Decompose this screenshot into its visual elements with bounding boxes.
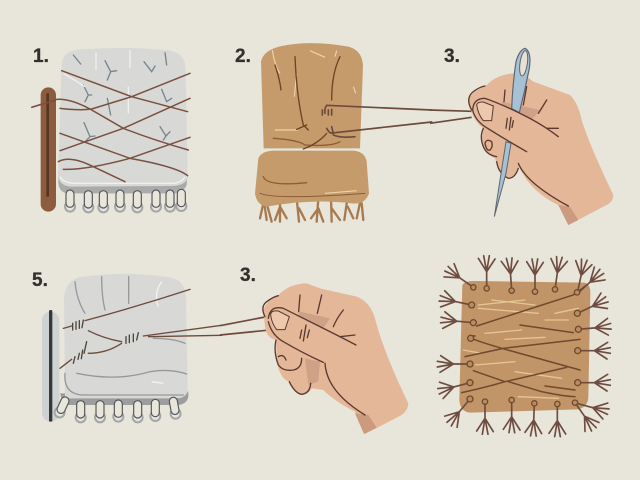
highlights (60, 50, 185, 183)
threads and stitches (60, 289, 222, 368)
lower leather piece (255, 151, 369, 207)
stick (42, 310, 59, 422)
lacing threads (462, 285, 587, 397)
hand silhouette (468, 73, 613, 225)
lacing holes (467, 285, 581, 407)
threads (430, 110, 472, 123)
thumb (473, 98, 558, 152)
threads (32, 71, 190, 182)
tassels left (436, 290, 476, 429)
step number 5: 5. (32, 270, 48, 291)
stitches and threads (322, 105, 432, 137)
hand outline (263, 295, 365, 415)
highlights (463, 300, 578, 398)
tassels bottom (477, 395, 610, 437)
threads (220, 317, 267, 335)
step number 2: 2. (235, 46, 251, 67)
step number 3, lower: 3. (240, 265, 256, 286)
wrist shade (558, 205, 578, 225)
panel: grey fabric with stitches (42, 274, 222, 422)
needle top (512, 48, 530, 113)
highlights (152, 282, 163, 383)
finger shade (502, 102, 540, 122)
thumbnail (477, 102, 493, 121)
fringe strands (260, 195, 363, 222)
tassels top (442, 256, 608, 300)
wrist shade (355, 413, 377, 434)
loops (53, 395, 181, 422)
leather creases (260, 57, 365, 197)
fabric hem and creases (65, 277, 187, 395)
hand outline (469, 86, 568, 206)
fabric creases (73, 53, 172, 142)
fabric shadow (60, 392, 188, 405)
needle tip (494, 142, 511, 217)
panel: grey fabric with loose threads (32, 48, 190, 212)
highlights (272, 50, 357, 193)
upper leather piece (261, 43, 363, 148)
step number 1: 1. (33, 46, 49, 67)
thumbnail (271, 311, 289, 330)
fabric hem (58, 170, 187, 193)
fabric sheet (64, 274, 188, 398)
needle eye (518, 50, 529, 76)
wooden stick (32, 87, 56, 212)
leather square (459, 281, 590, 413)
finger shade (298, 312, 330, 385)
fabric sheet (58, 48, 188, 187)
panel: tan leather pieces (255, 43, 432, 222)
thumb outline (473, 98, 558, 152)
hand silhouette (263, 283, 408, 434)
panel: finished laced leather square (436, 256, 612, 437)
fringe loops (65, 189, 186, 212)
step number 3, upper: 3. (444, 46, 460, 67)
panel: hand pulling threads (220, 283, 408, 434)
panel: hand holding needle (430, 48, 613, 225)
tassels right (574, 292, 612, 391)
